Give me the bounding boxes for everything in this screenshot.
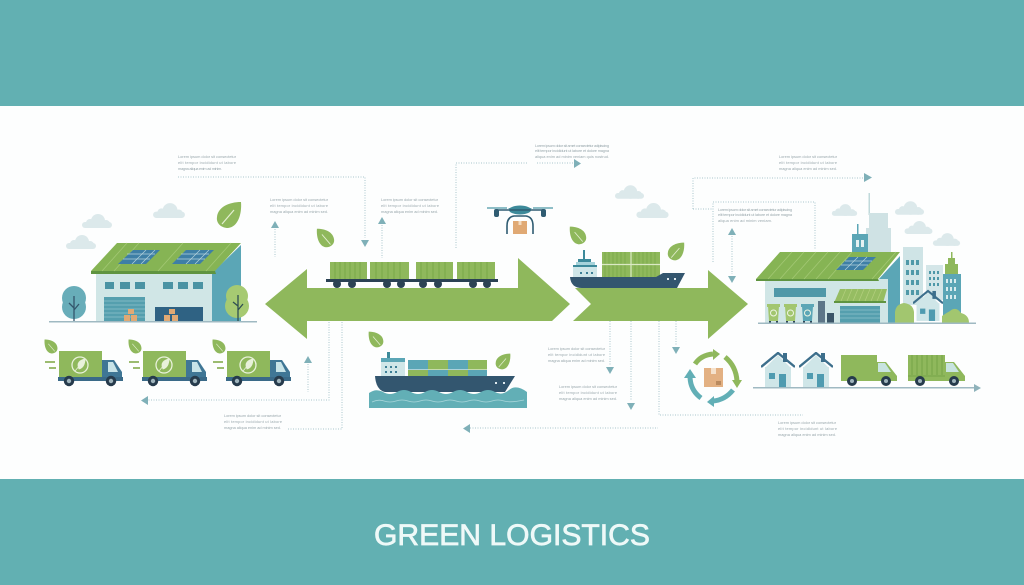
ground line	[758, 322, 976, 324]
bushes and house	[895, 291, 969, 323]
recycling loop icon	[684, 349, 742, 407]
text block 6: Lorem ipsum dolor sit amet consectetur adipiscing	[718, 207, 792, 212]
green truck 2	[908, 355, 965, 386]
text block 7	[548, 346, 606, 363]
title: GREEN LOGISTICS	[374, 519, 650, 552]
text block 10	[778, 420, 837, 437]
text block 4: Lorem ipsum dolor sit amet consectetur adipiscing	[535, 143, 609, 148]
cycle arrows	[684, 349, 742, 407]
leaf	[217, 202, 241, 228]
text block 1: magna aliqua enim ad minim.	[178, 166, 222, 171]
text block 9: elit tempor incididunt ut labore	[224, 419, 282, 424]
leaf	[570, 227, 586, 244]
text block 9: magna aliqua enim ad minim sed.	[224, 425, 281, 430]
houses and trucks delivery row	[753, 353, 981, 392]
warehouse building	[756, 252, 900, 323]
text block 4: elit tempor incididunt ut labore et dolore magna	[535, 148, 610, 153]
text block 10: elit tempor incididunt ut labore	[778, 426, 837, 431]
text block 8: elit tempor incididunt ut labore	[559, 390, 617, 395]
leaf	[369, 332, 383, 347]
leaf	[496, 354, 510, 369]
truck 3	[212, 340, 291, 386]
text block 5: elit tempor incididunt ut labore	[779, 160, 837, 165]
ground line	[49, 321, 257, 322]
text block 4: aliqua enim ad minim veniam quis nostrud.	[535, 154, 609, 159]
clouds	[66, 203, 185, 249]
right recycling warehouse with city	[756, 193, 976, 324]
delivery drone	[487, 206, 553, 234]
text block 1	[178, 154, 237, 171]
footer band	[0, 479, 1024, 585]
delivery trucks row	[44, 340, 291, 386]
freight train	[326, 262, 498, 288]
clouds above ship	[615, 185, 669, 218]
text block 3	[381, 197, 439, 214]
right chevron arrow	[573, 270, 748, 339]
text block 2: elit tempor incididunt ut labore	[270, 203, 328, 208]
text block 1: elit tempor incididunt ut labore	[178, 160, 236, 165]
building	[91, 243, 241, 322]
text block 3: Lorem ipsum dolor sit consectetur	[381, 197, 439, 202]
text block 3: magna aliqua enim ad minim sed.	[381, 209, 438, 214]
truck 1	[44, 340, 123, 386]
left warehouse with solar roof	[49, 202, 257, 322]
text block 3: elit tempor incididunt ut labore	[381, 203, 439, 208]
text block 7: elit tempor incididunt ut labore	[548, 352, 605, 357]
green truck 1	[841, 355, 897, 386]
clouds	[832, 201, 960, 246]
text block 7: Lorem ipsum dolor sit consectetur	[548, 346, 606, 351]
city skyline	[852, 193, 961, 316]
text block 5	[779, 154, 838, 171]
text block 6	[718, 207, 793, 223]
houses	[761, 353, 833, 387]
text block 8	[559, 384, 618, 401]
text block 7: magna aliqua enim ad minim sed.	[548, 358, 605, 363]
leaf	[668, 243, 684, 260]
text block 5: Lorem ipsum dolor sit consectetur	[779, 154, 838, 159]
text block 2: magna aliqua enim ad minim sed.	[270, 209, 328, 214]
text block 1: Lorem ipsum dolor sit consectetur	[178, 154, 237, 159]
header band	[0, 0, 1024, 106]
text block 10: Lorem ipsum dolor sit consectetur	[778, 420, 837, 425]
text block 2: Lorem ipsum dolor sit consectetur	[270, 197, 329, 202]
connector lines	[141, 159, 872, 433]
text block 8: Lorem ipsum dolor sit consectetur	[559, 384, 618, 389]
container ship on arrow	[570, 227, 685, 288]
truck 2	[128, 340, 207, 386]
text block 6: elit tempor incididunt ut labore et dolore magna	[718, 212, 793, 217]
text block 2	[270, 197, 329, 214]
baseline arrow	[753, 384, 981, 392]
text block 5: magna aliqua enim ad minim sed.	[779, 166, 837, 171]
leaf near train	[317, 229, 334, 247]
text block 8: magna aliqua enim ad minim sed.	[559, 396, 617, 401]
parcel	[704, 368, 723, 387]
text block 9: Lorem ipsum dolor sit consectetur	[224, 413, 282, 418]
cargo ship on water	[369, 332, 527, 408]
trees	[62, 285, 249, 322]
text block 4	[535, 143, 610, 159]
text block 10: magna aliqua enim ad minim sed.	[778, 432, 836, 437]
text block 6: aliqua enim ad minim veniam.	[718, 218, 772, 223]
left double-headed arrow	[265, 258, 570, 339]
text block 9	[224, 413, 282, 430]
recycling bins	[767, 304, 814, 323]
